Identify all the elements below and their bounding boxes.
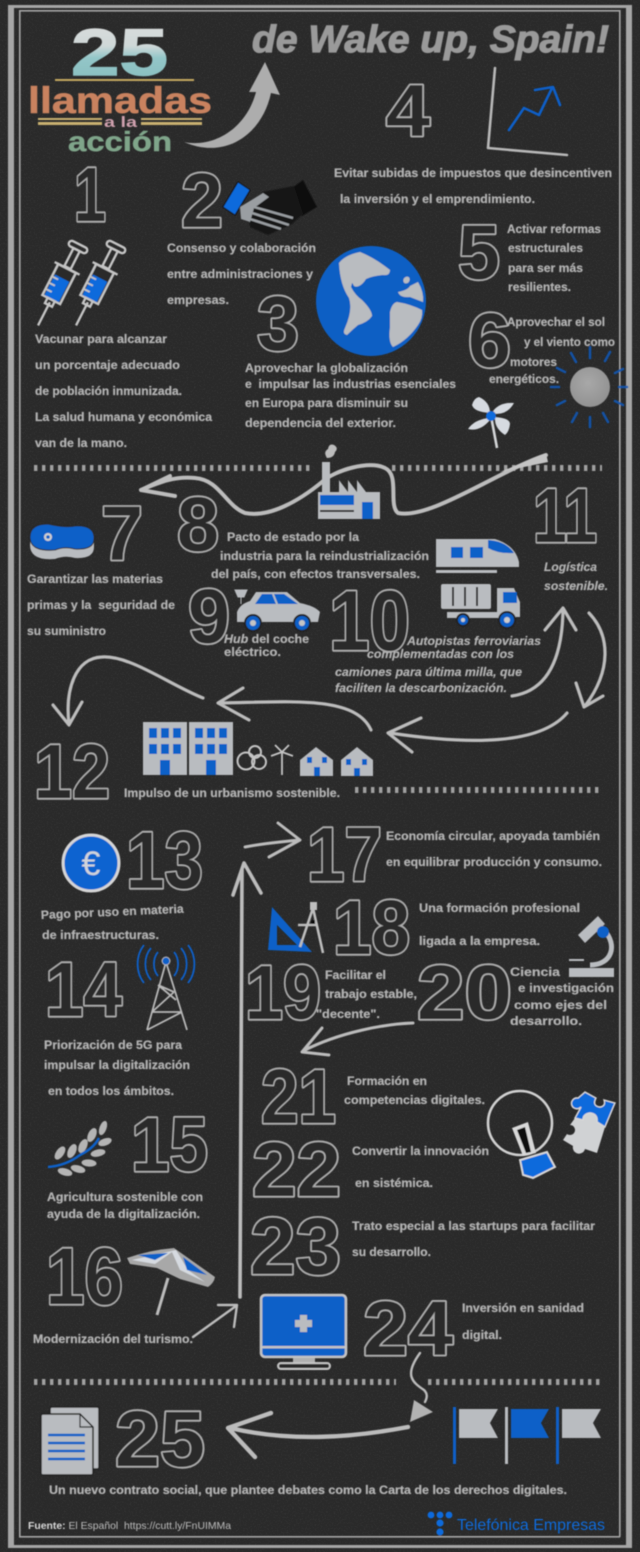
icon: truck — [441, 584, 520, 628]
text: item 6: energéticos. — [489, 372, 559, 386]
number 25: 25 — [115, 1394, 205, 1483]
text: item 14: Priorización de 5G para — [44, 1038, 182, 1052]
text: item 18: ligada a la empresa. — [419, 934, 540, 948]
text: item 19: Facilitar el — [325, 968, 386, 982]
text: item 21: competencias digitales. — [344, 1093, 485, 1107]
text: item 25: Un nuevo contrato social, que plantee debates como la Carta de los derechos digitales. — [49, 1483, 567, 1497]
number 23: 23 — [250, 1202, 341, 1292]
text: item 5: resilientes. — [508, 280, 571, 294]
text: item 20: como ejes del — [514, 998, 607, 1012]
number 18: 18 — [333, 885, 410, 971]
number 16: 16 — [46, 1232, 123, 1322]
text: item 8: Pacto de estado por la — [227, 530, 359, 544]
text: item 22 — [352, 1144, 489, 1190]
text: item 18: Una formación profesional — [419, 901, 580, 915]
number 8: 8 — [177, 482, 219, 568]
text: item 10: Autopistas ferroviarias — [406, 634, 541, 648]
text: item 4 — [334, 166, 612, 206]
icon: buildings and houses — [143, 722, 373, 776]
icon: puzzle pieces — [563, 1092, 615, 1154]
arrow: tourism to vertical line — [193, 1305, 237, 1337]
text: item 9: eléctrico. — [224, 645, 281, 659]
item 21: digital skills — [261, 1054, 485, 1140]
item 4: taxes — [334, 68, 612, 206]
text: item 10: complementadas con los — [367, 647, 514, 661]
item 14: 5G — [44, 945, 194, 1098]
text: item 12: Impulso de un urbanismo sostenible. — [124, 786, 340, 800]
number 24: 24 — [363, 1286, 453, 1372]
icon: electric car — [235, 590, 320, 631]
icon: growth chart — [488, 68, 567, 155]
text: item 19 — [316, 968, 417, 1021]
text: item 6 — [489, 315, 615, 386]
icon: train — [436, 539, 519, 573]
arrow: long vertical — [233, 863, 261, 1297]
number 7: 7 — [101, 491, 143, 577]
text: item 15: Agricultura sostenible con — [47, 1190, 203, 1204]
item 8: industry pact — [177, 482, 429, 581]
text: item 7: su suministro — [27, 624, 106, 638]
text: item 1 — [35, 332, 212, 450]
icon: light bulb — [488, 1091, 555, 1178]
text: item 20: Ciencia — [510, 965, 560, 979]
text: item 14: impulsar la digitalización — [44, 1058, 190, 1072]
text: item 8 — [211, 530, 429, 581]
text: item 2: empresas. — [167, 293, 229, 307]
text: item 9: Hub del coche — [224, 632, 309, 646]
item 1: vaccination — [26, 152, 212, 450]
text: item 20: e investigación — [518, 981, 614, 995]
text: item 10: faciliten la descarbonización. — [335, 681, 507, 695]
item 15: agriculture — [47, 1102, 208, 1221]
text: item 5: estructurales — [508, 241, 583, 255]
text: item 2: Consenso y colaboración — [167, 241, 316, 255]
text: item 18 — [419, 901, 580, 948]
icon: microscope — [569, 916, 614, 977]
number 2: 2 — [181, 158, 223, 244]
item 22: systemic innovation — [252, 1091, 615, 1213]
text: item 15: ayuda de la digitalización. — [47, 1207, 200, 1221]
text: item 21: Formación en — [347, 1074, 427, 1088]
text: item 6: motores — [510, 355, 557, 369]
icon: documents — [41, 1407, 99, 1475]
headline: de Wake up, Spain!: de Wake up, Spain! — [252, 19, 609, 61]
item 16: tourism — [33, 1232, 215, 1346]
text: item 22: Convertir la innovación — [352, 1144, 489, 1158]
arrow: toward number 25 — [228, 1413, 408, 1457]
item 6: sun and wind — [468, 298, 627, 448]
arrow: over the buildings — [218, 688, 371, 730]
number 15: 15 — [131, 1102, 208, 1188]
number 5: 5 — [458, 210, 500, 296]
arrow: toward number 17 — [245, 823, 300, 857]
text: item 20: desarrollo. — [510, 1014, 582, 1028]
text: item 22: en sistémica. — [355, 1176, 433, 1190]
text: item 2 — [167, 241, 316, 307]
number 3: 3 — [257, 281, 299, 367]
text: item 19: "decente". — [316, 1007, 380, 1021]
text: item 3 — [245, 361, 456, 430]
text: item 1: un porcentaje adecuado — [35, 358, 180, 372]
text: item 24 — [462, 1301, 584, 1342]
arrow: up toward logistics — [512, 608, 576, 696]
item 17: circular economy — [307, 812, 602, 898]
text: item 17 — [386, 829, 602, 869]
text: item 1: de población inmunizada. — [35, 384, 182, 398]
text: item 5 — [507, 222, 601, 294]
text: item 9 — [224, 632, 309, 659]
text: item 3: e impulsar las industrias esenciales — [245, 377, 456, 391]
number 20: 20 — [417, 950, 512, 1036]
text: item 13 — [41, 902, 184, 942]
text: item 7: Garantizar las materias — [27, 572, 163, 586]
text: item 8: del país, con efectos transversales. — [211, 567, 420, 581]
icon: euro coin — [63, 835, 119, 891]
icon: set square and compass — [268, 902, 323, 953]
item 10: rail motorways — [329, 539, 541, 695]
item 11: logistics — [533, 473, 608, 593]
text: item 13: Pago por uso en materia — [41, 902, 184, 922]
number 14: 14 — [45, 947, 122, 1033]
arrow: toward urbanism — [388, 713, 567, 752]
logo: Telefónica Empresas: Telefónica Empresas — [457, 1517, 605, 1534]
item 23: startups — [250, 1202, 595, 1292]
icon: globe — [316, 246, 426, 356]
item 20: science — [417, 916, 614, 1036]
title: 25 llamadas a la acción: acción — [68, 126, 172, 157]
text: item 3: Aprovechar la globalización — [245, 361, 408, 375]
text: item 14 — [44, 1038, 190, 1098]
text: item 4: Evitar subidas de impuestos que desincentiven — [334, 166, 612, 180]
text: item 21 — [344, 1074, 485, 1107]
item 2: consensus — [167, 158, 317, 307]
item 19: stable work — [245, 950, 417, 1036]
icon: syringes — [26, 238, 130, 332]
text: item 23 — [352, 1219, 595, 1259]
text: item 6: Aprovechar el sol — [507, 315, 605, 329]
text: item 4: la inversión y el emprendimiento. — [340, 192, 535, 206]
number 6: 6 — [468, 298, 511, 384]
arrow: wavy path through the factory — [141, 453, 548, 514]
item 3: globalization — [245, 246, 456, 430]
text: item 1: Vacunar para alcanzar — [35, 332, 167, 346]
text: item 16: Modernización del turismo. — [33, 1332, 193, 1346]
number 17: 17 — [307, 812, 382, 898]
text: item 5: para ser más — [508, 261, 583, 275]
text: item 2: entre administraciones y — [167, 267, 313, 281]
number 21: 21 — [261, 1054, 336, 1140]
item 9: electric car hub — [188, 574, 320, 660]
text: item 8: industria para la reindustrialización — [220, 549, 429, 563]
title: 25 llamadas a la acción — [28, 15, 212, 157]
number 1: 1 — [74, 152, 106, 238]
text: item 1: van de la mano. — [35, 436, 127, 450]
title: 25 llamadas a la acción: a la — [104, 114, 138, 131]
text: item 11: sostenible. — [544, 579, 608, 593]
icon: steak — [30, 524, 94, 559]
text: item 10: camiones para última milla, que — [335, 665, 522, 679]
text: item 17: Economía circular, apoyada también — [386, 829, 600, 843]
number 13: 13 — [126, 816, 203, 906]
item 25: social contract — [41, 1394, 567, 1497]
big arrow from title to headline — [184, 62, 280, 148]
icon: wheat branch — [48, 1120, 113, 1177]
text: item 19: trabajo estable, — [325, 987, 417, 1001]
icon: beach umbrella — [127, 1248, 215, 1315]
icon: euro coin: € — [82, 845, 101, 883]
item 13: pay per use — [41, 816, 203, 942]
item 12: urbanism — [34, 722, 373, 815]
source credit: Fuente: El Español https://cutt.ly/FnUIMMa — [28, 1520, 231, 1532]
text: item 13: de infraestructuras. — [42, 928, 159, 942]
text: item 23: su desarrollo. — [352, 1245, 431, 1259]
text: item 7: primas y la seguridad de — [27, 598, 175, 612]
number 4: 4 — [386, 71, 430, 152]
text: item 14: en todos los ámbitos. — [48, 1084, 174, 1098]
icon: monitor with cross — [261, 1295, 346, 1369]
text: item 3: en Europa para disminuir su — [245, 396, 408, 410]
arrow: toward number 12 — [53, 657, 203, 725]
text: item 7 — [27, 572, 175, 638]
item 18: vocational training — [268, 885, 580, 971]
arrow: from 20 to 21 — [302, 1023, 413, 1055]
title: 25 llamadas a la acción: 25 — [71, 15, 168, 89]
text: item 10 — [335, 634, 541, 695]
icon: pinwheel — [468, 397, 514, 448]
item 5: reforms — [458, 210, 601, 296]
number 22: 22 — [252, 1127, 341, 1213]
text: item 3: dependencia del exterior. — [245, 416, 396, 430]
text: item 11: Logística — [544, 560, 597, 574]
text: item 20 — [510, 965, 614, 1028]
text: item 24: Inversión en sanidad — [462, 1301, 584, 1315]
icon: sun — [551, 347, 627, 427]
arrow: down from logistics — [576, 613, 605, 707]
item 24: digital health — [261, 1286, 584, 1372]
number 11: 11 — [533, 473, 597, 559]
arrow: from 24 down to flags — [410, 1353, 433, 1422]
text: item 23: Trato especial a las startups para facilitar — [352, 1219, 595, 1233]
icon: signal tower — [138, 945, 194, 1030]
icon: factory — [318, 444, 380, 519]
text: item 24: digital. — [462, 1328, 502, 1342]
text: item 15 — [47, 1190, 203, 1221]
number 12: 12 — [34, 729, 110, 815]
text: item 17: en equilibrar producción y consumo. — [386, 855, 602, 869]
title: 25 llamadas a la acción: llamadas — [28, 80, 212, 121]
logo: Telefónica Empresas — [428, 1512, 605, 1536]
number 10: 10 — [329, 574, 410, 669]
item 7: raw materials — [27, 491, 175, 638]
icon: flags — [453, 1407, 601, 1464]
icon: handshake — [223, 180, 317, 235]
text: item 5: Activar reformas — [507, 222, 601, 236]
text: item 6: y el viento como — [524, 335, 615, 349]
number 19: 19 — [245, 950, 321, 1036]
text: item 1: La salud humana y económica — [35, 410, 212, 424]
text: item 11 — [544, 560, 608, 593]
number 9: 9 — [188, 574, 230, 660]
